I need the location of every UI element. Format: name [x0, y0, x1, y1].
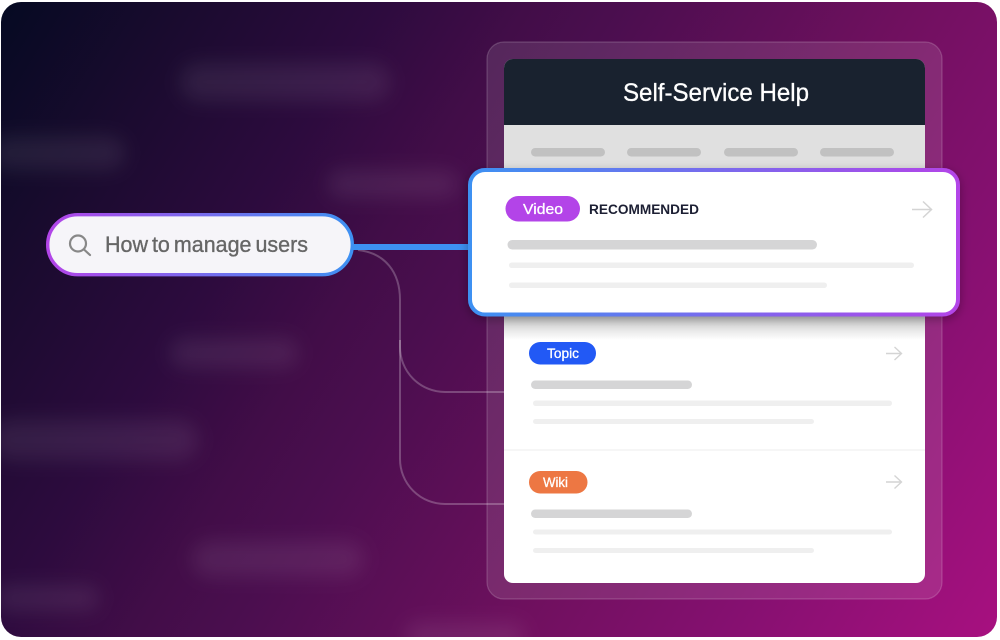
search box	[48, 215, 352, 275]
connector lines to results	[358, 250, 504, 504]
navigation strip	[504, 125, 925, 168]
thick connector	[352, 244, 470, 250]
arrow: topic	[886, 347, 902, 360]
header bar	[504, 59, 925, 125]
badge: video	[506, 196, 580, 222]
search text: How to manage users	[105, 232, 308, 257]
badge: topic: Topic	[547, 346, 579, 361]
result card: wiki	[529, 471, 902, 553]
shadow beneath recommended card	[504, 316, 925, 336]
outer translucent panel frame	[487, 42, 942, 599]
badge: video: Video	[523, 202, 563, 218]
recommended card	[470, 170, 958, 314]
arrow: wiki	[886, 476, 902, 488]
badge: topic	[529, 342, 596, 364]
badge: wiki	[529, 471, 588, 494]
arrow: video	[912, 202, 932, 218]
badge: wiki: Wiki	[543, 475, 568, 490]
result card: topic	[529, 342, 902, 424]
title: Self-Service Help	[623, 79, 809, 107]
blurred background streaks	[0, 63, 525, 640]
recommended label: RECOMMENDED	[589, 202, 699, 217]
help page panel	[504, 59, 925, 583]
icon: magnifier	[70, 236, 90, 255]
